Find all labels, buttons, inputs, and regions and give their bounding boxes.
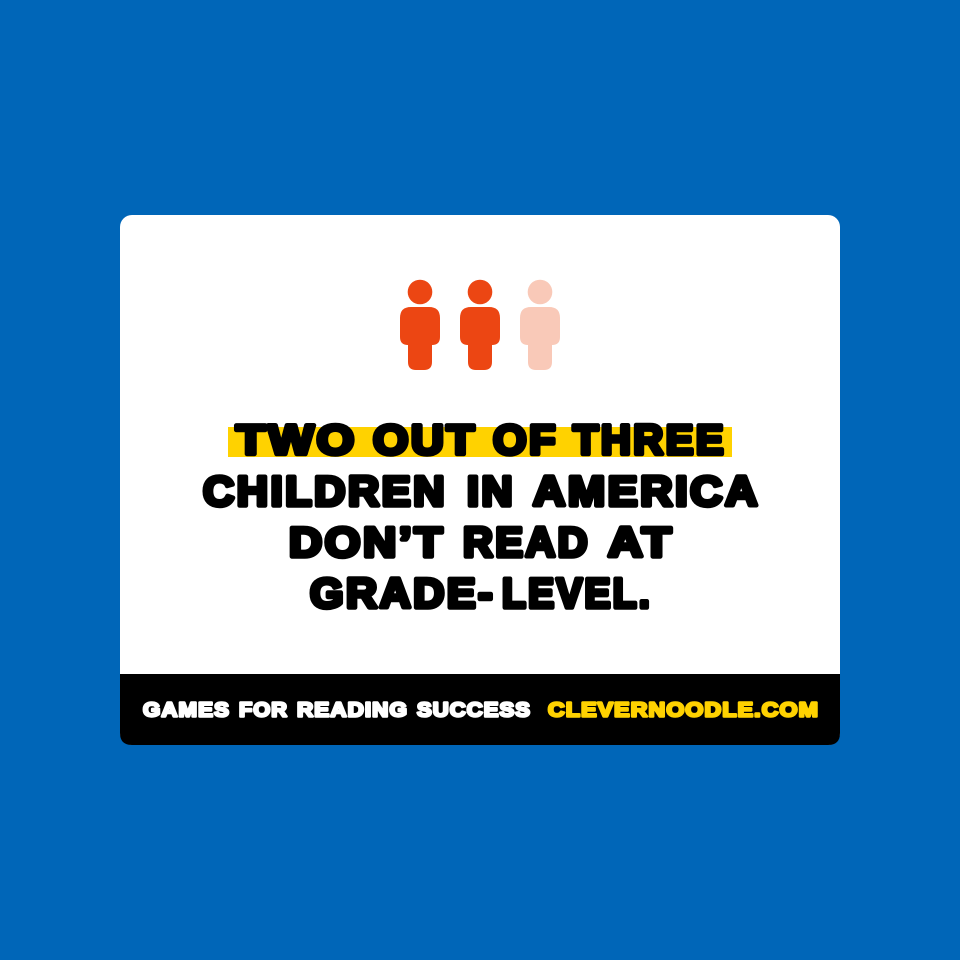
icon: person faded [520,280,560,370]
footer tagline: READING [297,698,408,722]
headline line 4 [310,570,652,616]
headline line 2: CHILDREN [203,468,447,514]
headline line 2: AMERICA [533,468,760,514]
headline line 3: AT [608,518,674,566]
headline line 4: GRADE- [310,570,495,616]
headline line 4: LEVEL. [502,570,652,616]
headline line 1: OUT [373,416,477,463]
footer tagline: SUCCESS [417,698,531,722]
headline text [203,416,760,616]
headline line 3: READ [463,518,590,566]
headline line 1: TWO [236,416,357,463]
icon: person filled 1 [400,280,440,370]
headline line 3 [289,518,674,566]
icon: person filled 2 [460,280,500,370]
headline line 2: IN [467,468,515,514]
headline line 3: DON’T [289,518,445,566]
footer tagline: FOR [239,698,288,722]
headline highlight bar [228,427,732,457]
footer website: CLEVERNOODLE.COM [548,698,819,722]
headline line 2 [203,468,760,514]
headline line 1 [236,416,726,463]
headline line 1: THREE [573,416,726,463]
footer tagline [143,698,531,722]
panel: white card [120,215,840,745]
headline line 1: OF [493,416,558,463]
footer tagline: GAMES [143,698,230,722]
icon row: three people [400,280,560,370]
footer bar [120,674,840,745]
